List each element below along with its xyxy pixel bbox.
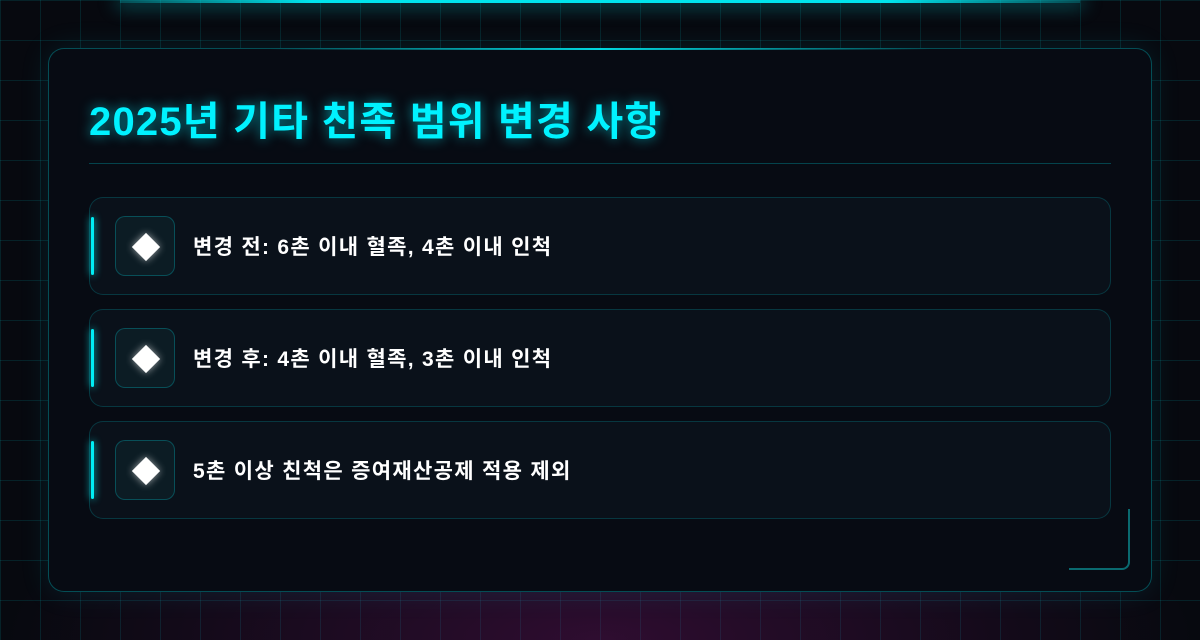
icon: diamond [115, 440, 175, 500]
panel: main card [48, 48, 1152, 592]
item: exclusion [89, 421, 1111, 519]
text: before: 변경 전: 6촌 이내 혈족, 4촌 이내 인척 [193, 236, 552, 259]
text: exclusion: 5촌 이상 친척은 증여재산공제 적용 제외 [193, 460, 572, 483]
icon: diamond [115, 216, 175, 276]
title: 2025년 기타 친족 범위 변경 사항 [89, 100, 662, 144]
icon: diamond [115, 328, 175, 388]
item: after change [89, 309, 1111, 407]
item: before change [89, 197, 1111, 295]
text: after: 변경 후: 4촌 이내 혈족, 3촌 이내 인척 [193, 348, 552, 371]
